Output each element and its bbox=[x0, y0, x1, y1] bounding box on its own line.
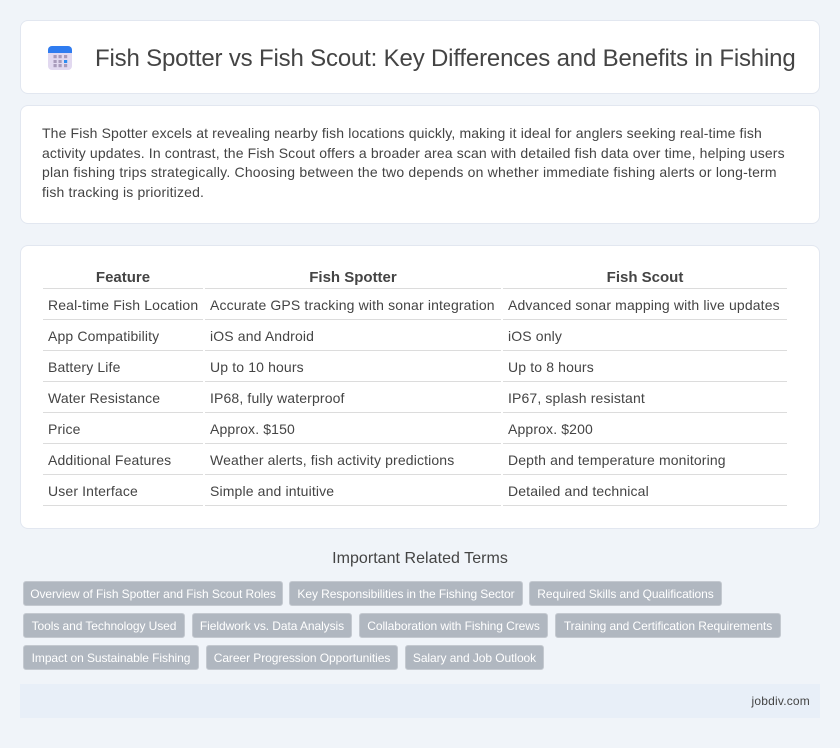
related terms tags: Impact on Sustainable Fishing bbox=[32, 651, 190, 665]
related terms tags bbox=[23, 581, 781, 670]
table row: user interface: Detailed and technical bbox=[508, 483, 649, 499]
table row: app compatibility: iOS and Android bbox=[210, 328, 314, 344]
table row: additional features: Weather alerts, fish activity predictions bbox=[210, 452, 454, 468]
related terms tags: Fieldwork vs. Data Analysis bbox=[200, 619, 344, 633]
related terms tags: Training and Certification Requirements bbox=[564, 619, 772, 633]
table row: battery life bbox=[48, 359, 594, 375]
related terms tags: Salary and Job Outlook bbox=[413, 651, 536, 665]
intro paragraph bbox=[42, 125, 785, 200]
title: Fish Spotter vs Fish Scout: Key Differences and Benefits in Fishing bbox=[95, 45, 796, 72]
table header: Fish Scout bbox=[607, 269, 683, 286]
related terms tags: Overview of Fish Spotter and Fish Scout Roles bbox=[30, 587, 276, 601]
table row: app compatibility bbox=[48, 328, 562, 344]
related terms tags: Career Progression Opportunities bbox=[214, 651, 390, 665]
table row: water resistance bbox=[48, 390, 645, 406]
table header: Fish Spotter bbox=[309, 269, 397, 286]
table row: real-time fish location bbox=[48, 297, 780, 313]
table header: Feature bbox=[96, 269, 150, 286]
table row: water resistance: Water Resistance bbox=[48, 390, 160, 406]
footer bbox=[20, 684, 820, 718]
table row: additional features: Depth and temperature monitoring bbox=[508, 452, 726, 468]
panel: header bbox=[20, 20, 820, 94]
related terms tags: Key Responsibilities in the Fishing Sector bbox=[297, 587, 515, 601]
related terms tags: Required Skills and Qualifications bbox=[537, 587, 714, 601]
table row: real-time fish location: Real-time Fish Location bbox=[48, 297, 198, 313]
related terms tags: Tools and Technology Used bbox=[32, 619, 176, 633]
table row: real-time fish location: Accurate GPS tracking with sonar integration bbox=[210, 297, 495, 313]
table row: battery life: Up to 10 hours bbox=[210, 359, 304, 375]
table row: user interface: User Interface bbox=[48, 483, 138, 499]
table row: battery life: Battery Life bbox=[48, 359, 120, 375]
table header bbox=[96, 269, 684, 286]
intro paragraph: activity updates. In contrast, the Fish Scout offers a broader area scan with detailed fish data over time, helping users bbox=[42, 145, 785, 161]
footer source text: jobdiv.com bbox=[752, 694, 810, 708]
related terms heading: Important Related Terms bbox=[332, 550, 508, 567]
table row: additional features: Additional Features bbox=[48, 452, 171, 468]
table row: additional features bbox=[48, 452, 726, 468]
table row: app compatibility: iOS only bbox=[508, 328, 562, 344]
table row: price: Price bbox=[48, 421, 81, 437]
related terms tags: Collaboration with Fishing Crews bbox=[367, 619, 540, 633]
panel: intro text bbox=[20, 105, 820, 224]
table row: user interface bbox=[48, 483, 649, 499]
table row: price: Approx. $150 bbox=[210, 421, 295, 437]
table row: user interface: Simple and intuitive bbox=[210, 483, 334, 499]
table row: water resistance: IP68, fully waterproof bbox=[210, 390, 345, 406]
table row: price: Approx. $200 bbox=[508, 421, 593, 437]
icon: calendar bbox=[48, 46, 72, 70]
table row: battery life: Up to 8 hours bbox=[508, 359, 594, 375]
intro paragraph: plan fishing trips strategically. Choosing between the two depends on whether immediate fishing alerts or long-term bbox=[42, 164, 777, 180]
table row: real-time fish location: Advanced sonar mapping with live updates bbox=[508, 297, 780, 313]
intro paragraph: fish tracking is prioritized. bbox=[42, 184, 204, 200]
table row: price bbox=[48, 421, 593, 437]
panel: comparison table bbox=[20, 245, 820, 529]
intro paragraph: The Fish Spotter excels at revealing nearby fish locations quickly, making it ideal for anglers seeking real-time fish bbox=[42, 125, 762, 141]
table row: water resistance: IP67, splash resistant bbox=[508, 390, 645, 406]
table row: app compatibility: App Compatibility bbox=[48, 328, 159, 344]
